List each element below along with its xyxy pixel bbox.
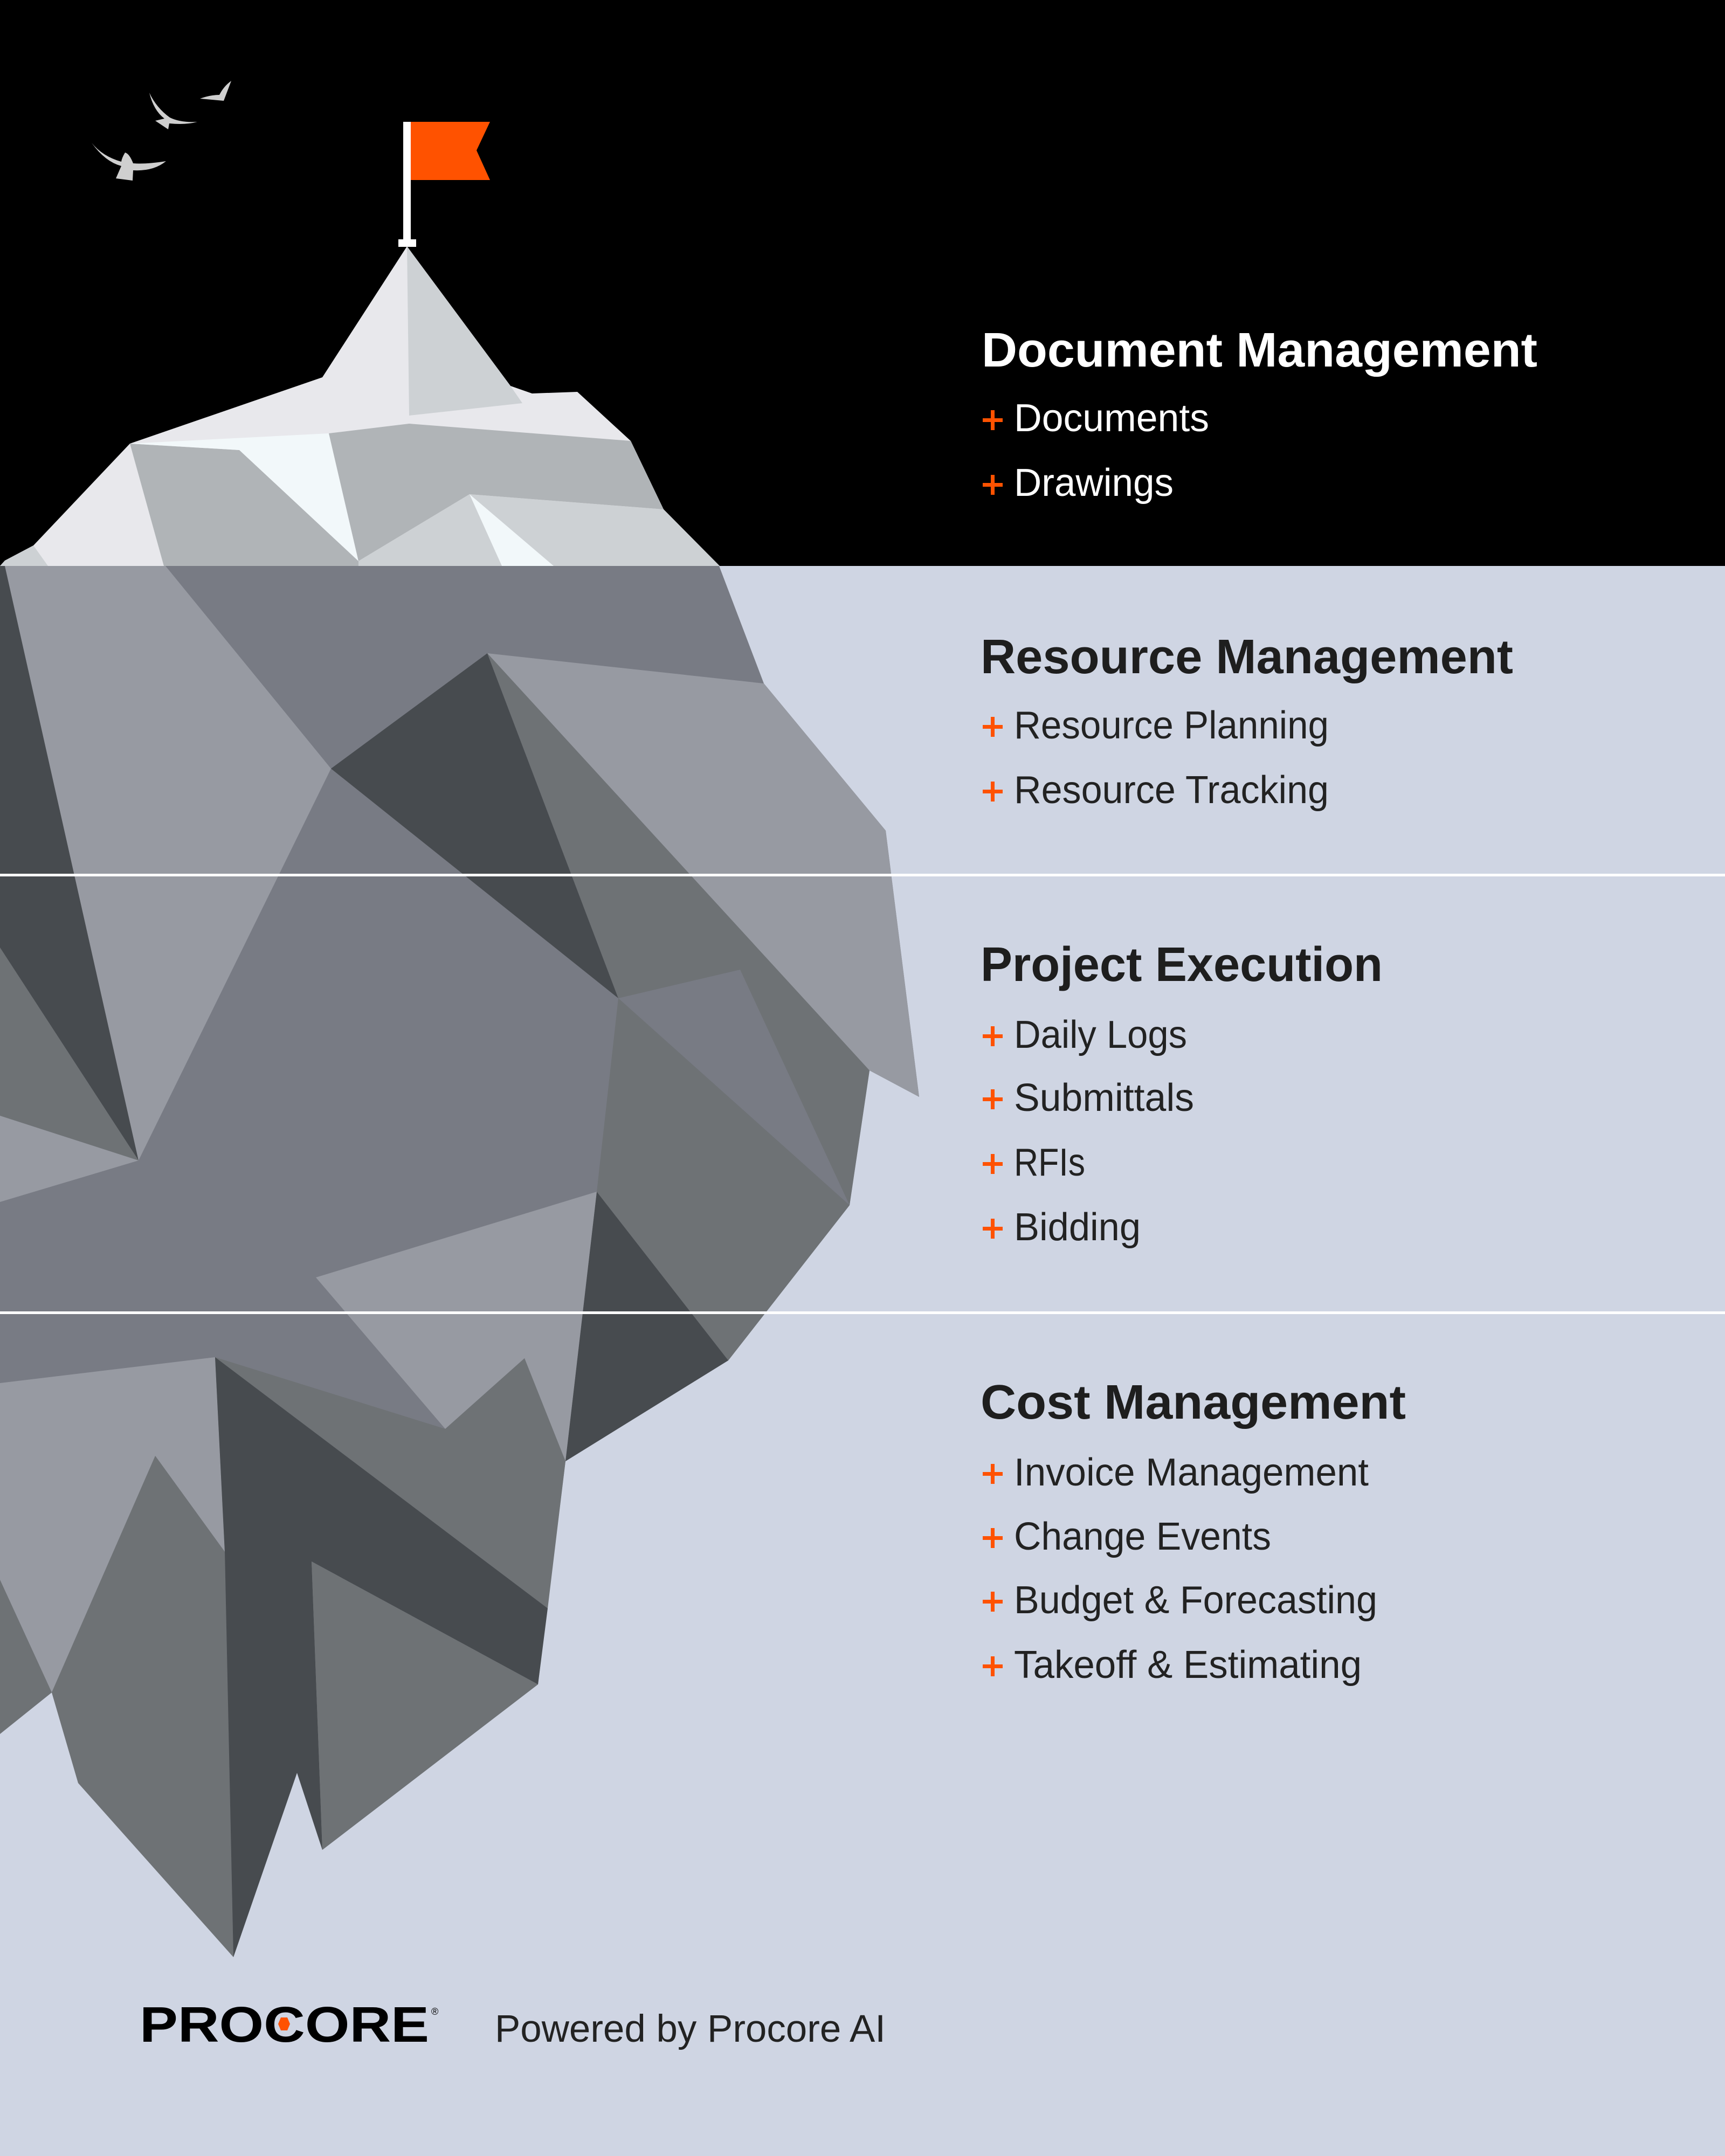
- logo: procore: PROCORE: [140, 1996, 429, 2053]
- list: cost items: Invoice Management: [1014, 1451, 1369, 1494]
- icon: birds: [92, 81, 231, 181]
- list: execution items: Daily Logs: [1014, 1013, 1187, 1056]
- list: execution items: RFIs: [1014, 1141, 1085, 1184]
- panel: project execution: [981, 938, 1383, 1249]
- list: resource items: Resource Planning: [1014, 704, 1329, 747]
- heading: cost management: Cost Management: [981, 1376, 1406, 1429]
- panel: document management: [982, 323, 1537, 505]
- heading: project execution: Project Execution: [981, 938, 1383, 992]
- list: resource items: [983, 704, 1329, 812]
- heading: resource management: Resource Management: [981, 630, 1513, 684]
- list: execution items: Bidding: [1014, 1206, 1141, 1249]
- iceberg: underwater: [0, 566, 919, 1957]
- heading: document management: Document Management: [982, 323, 1537, 377]
- iceberg: above water: [0, 246, 720, 566]
- list: execution items: [983, 1013, 1194, 1249]
- list: cost items: Budget & Forecasting: [1014, 1579, 1377, 1622]
- list: cost items: Change Events: [1014, 1515, 1271, 1558]
- list: document items: Documents: [1014, 397, 1209, 440]
- list: cost items: [983, 1451, 1377, 1687]
- text: powered by: Powered by Procore AI: [495, 2008, 886, 2050]
- panel: resource management: [981, 630, 1513, 812]
- icon: flag: [398, 122, 490, 247]
- list: document items: Drawings: [1014, 461, 1174, 505]
- list: cost items: Takeoff & Estimating: [1014, 1643, 1362, 1687]
- list: resource items: Resource Tracking: [1014, 769, 1329, 812]
- list: execution items: Submittals: [1014, 1076, 1194, 1120]
- logo: procore: ®: [431, 2006, 438, 2017]
- list: document items: [983, 397, 1209, 505]
- panel: cost management: [981, 1376, 1406, 1687]
